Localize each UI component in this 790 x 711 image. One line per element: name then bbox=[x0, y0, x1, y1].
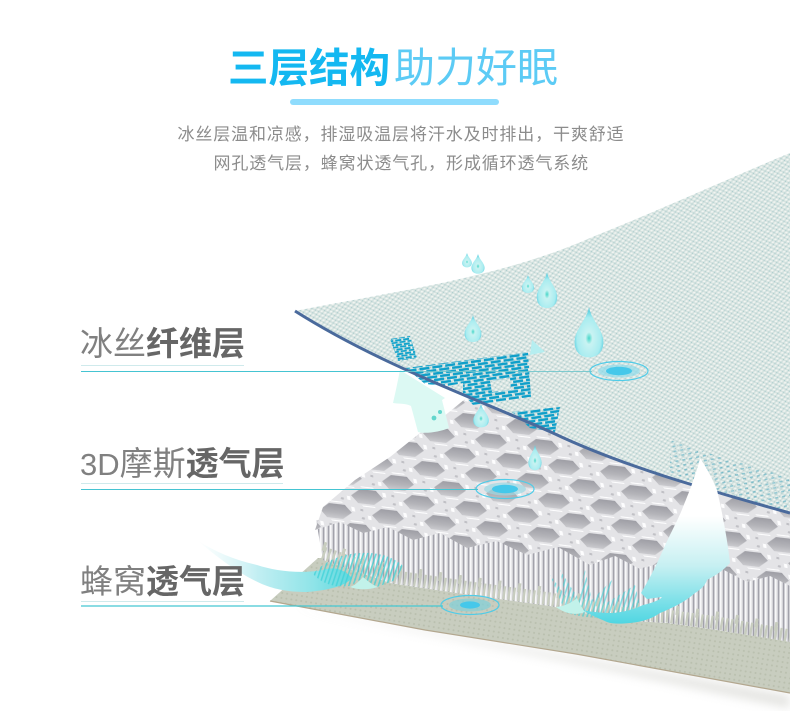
top layer: ice silk sheet bbox=[295, 153, 790, 513]
description text bbox=[178, 125, 624, 173]
bottom layer: honeycomb base sheet bbox=[270, 558, 790, 708]
title bbox=[228, 45, 558, 91]
mesh top surface bbox=[315, 395, 790, 586]
ring: ice silk layer bbox=[590, 362, 648, 380]
label: 3D moss breathable layer: 3D摩斯透气层 bbox=[80, 445, 285, 482]
middle layer: 3D mesh bbox=[315, 395, 790, 642]
ring: 3D mesh layer bbox=[476, 480, 534, 498]
leader lines bbox=[81, 366, 592, 606]
label: ice silk fibre layer: 冰丝纤维层 bbox=[80, 325, 245, 362]
ring: honeycomb layer bbox=[441, 596, 499, 614]
title underline bar bbox=[290, 99, 499, 105]
description text: 冰丝层温和凉感，排湿吸温层将汗水及时排出，干爽舒适 bbox=[178, 125, 624, 144]
airflow swoosh right bbox=[550, 458, 730, 624]
title: 助力好眠 bbox=[394, 45, 558, 91]
mesh bristles bbox=[316, 520, 790, 642]
title: 三层结构 bbox=[228, 45, 390, 91]
upward air arrow bbox=[393, 370, 449, 433]
description text: 网孔透气层，蜂窝状透气孔，形成循环透气系统 bbox=[214, 154, 589, 173]
water drops bbox=[462, 253, 603, 470]
airflow swoosh left bbox=[197, 540, 403, 592]
label: honeycomb breathable layer: 蜂窝透气层 bbox=[80, 563, 245, 600]
sheet blue edge bbox=[295, 311, 790, 513]
callout rings bbox=[441, 362, 648, 614]
teal perspiration pattern bbox=[390, 336, 790, 511]
